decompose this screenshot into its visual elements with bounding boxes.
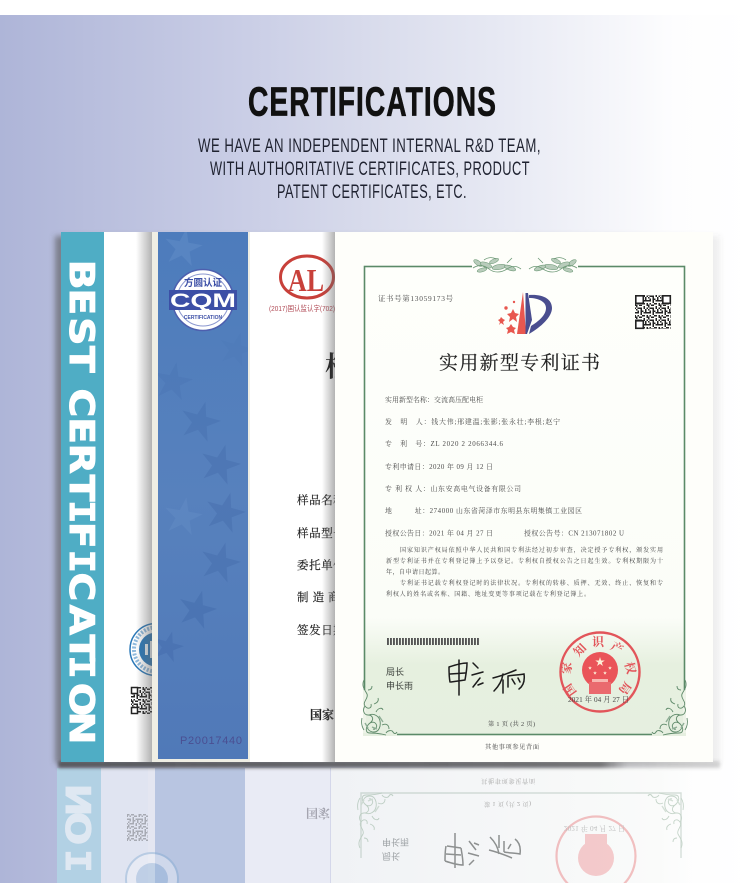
reflected label: 国家: [306, 806, 330, 821]
page number: 第 1 页 (共 2 页): [488, 720, 535, 728]
icon: QR code: [131, 687, 155, 714]
certificate body text: 利权人的姓名或名称、国籍、地址变更等事项记载在专利登记簿上。: [386, 590, 590, 598]
reflected seal: [126, 853, 178, 883]
footer note: 其他事项参见背面: [485, 743, 539, 751]
panel shadow: [55, 236, 720, 763]
field labels: 国家: [310, 707, 334, 722]
certificate body text: [386, 546, 663, 598]
serial number: P20017440: [180, 735, 242, 747]
icon: QR code: [635, 295, 671, 329]
barcode: [386, 638, 480, 645]
vertical heading: I: [62, 500, 102, 524]
signature: [449, 660, 524, 695]
certificate number: 证书号第13059173号: [378, 294, 454, 303]
icon: round blue seal: [130, 624, 182, 676]
vertical heading: CAT: [62, 572, 102, 661]
official red seal: 权: [622, 660, 639, 676]
official red seal: 知: [570, 640, 589, 659]
official red seal: 识: [592, 635, 605, 649]
reflected frame: [358, 793, 683, 858]
official red seal: [559, 632, 640, 712]
green frame: [364, 266, 684, 734]
reflected red seal: [556, 816, 636, 883]
certificate fields: [385, 395, 624, 538]
certificate fields: 发 明 人：钱大伟;邢建温;张影;张永壮;李根;赵宁: [385, 417, 560, 426]
certificate fields: 专利申请日：2020 年 09 月 12 日: [385, 462, 493, 471]
signatory: 局长: [386, 666, 404, 677]
CQM logo: CQM: [170, 291, 236, 312]
official red seal: 局: [616, 679, 634, 697]
subtitle text block: PATENT CERTIFICATES, ETC.: [277, 182, 467, 203]
certificate body text: 年，自申请日起算。: [386, 568, 444, 576]
reflected QR code: [127, 814, 148, 841]
bottom shadow: [58, 761, 720, 768]
vertical heading: BEST CERT: [62, 260, 102, 501]
field labels: 委托单位: [297, 558, 345, 572]
field labels: 签发日期: [297, 623, 345, 637]
certificate fields: 授权公告日：2021 年 04 月 27 日: [385, 528, 493, 538]
icon: patent office emblem: [498, 292, 552, 334]
subtitle text block: [198, 136, 541, 203]
field labels: 制 造 商: [297, 590, 340, 604]
subtitle text block: WE HAVE AN INDEPENDENT INTERNAL R&D TEAM,: [198, 136, 541, 157]
reflected page text: [481, 777, 535, 808]
panel: CAL test report: [250, 232, 353, 762]
panel: CQM certificate: [150, 225, 257, 762]
field labels: 样品型号: [297, 526, 345, 540]
certificate body text: 新型专利证书并在专利登记簿上予以登记。专利权自授权公告之日起生效。专利权期限为十: [386, 557, 663, 565]
reflected signatory: 局长: [382, 851, 400, 862]
official red seal: 产: [608, 639, 626, 657]
reflected signatory: [382, 837, 409, 862]
certificate fields: 专 利 号：ZL 2020 2 2066344.6: [385, 439, 504, 448]
vertical heading: I: [62, 655, 102, 679]
signatory: [386, 666, 413, 691]
reflected signatory: 申长雨: [382, 837, 409, 848]
frame ornaments: [362, 257, 687, 736]
official red seal: 家: [559, 661, 574, 675]
field labels: [297, 493, 345, 722]
reflected signature: [445, 833, 520, 868]
vertical heading: I: [62, 550, 102, 573]
signatory: 申长雨: [386, 680, 413, 691]
certificate fields: 实用新型名称：交流高压配电柜: [385, 395, 483, 404]
accreditation number: (2017)国认监认字(702): [269, 303, 335, 313]
vertical heading: F: [62, 522, 102, 549]
panel: utility patent certificate: [335, 232, 713, 762]
CQM logo: 方圆认证: [184, 277, 222, 289]
reflected page text: 其他事项参见背面: [481, 777, 535, 785]
certificate body text: 专利证书记载专利权登记时的法律状况。专利权的转移、质押、无效、终止、恢复和专: [400, 579, 663, 587]
panel: best certification certificate: [61, 232, 182, 762]
field labels: 样品名称: [297, 493, 345, 507]
certificate fields: 授权公告号：CN 213071802 U: [524, 528, 624, 538]
reflection of certificates: [57, 766, 716, 883]
reflected red seal: 2021 年 04 月 27 日: [564, 824, 625, 833]
mirrored artwork: [58, 777, 683, 883]
title: CERTIFICATIONS: [248, 79, 497, 125]
official red seal: 国: [560, 681, 579, 700]
CQM logo: [169, 270, 237, 330]
reflected page text: 第 1 页 (共 2 页): [484, 800, 531, 808]
vertical heading: ON: [62, 683, 102, 744]
heading fragment: 检: [325, 351, 353, 383]
subtitle text block: WITH AUTHORITATIVE CERTIFICATES, PRODUCT: [210, 159, 530, 180]
icon: CAL logo: AL: [288, 262, 324, 298]
reflected heading: ON: [58, 784, 98, 845]
certificate heading: 实用新型专利证书: [439, 352, 600, 374]
reflected heading: I: [58, 849, 98, 873]
certificate fields: 地 址：274000 山东省菏泽市东明县东明集镇工业园区: [385, 506, 582, 515]
star watermarks: [158, 232, 244, 661]
CQM logo: CERTIFICATION: [184, 315, 223, 321]
certificate fields: 专 利 权 人：山东安高电气设备有限公司: [385, 484, 521, 493]
certificate body text: 国家知识产权局依照中华人民共和国专利法经过初步审查，决定授予专利权，颁发实用: [400, 546, 663, 554]
grant date: 2021 年 04 月 27 日: [568, 695, 629, 704]
